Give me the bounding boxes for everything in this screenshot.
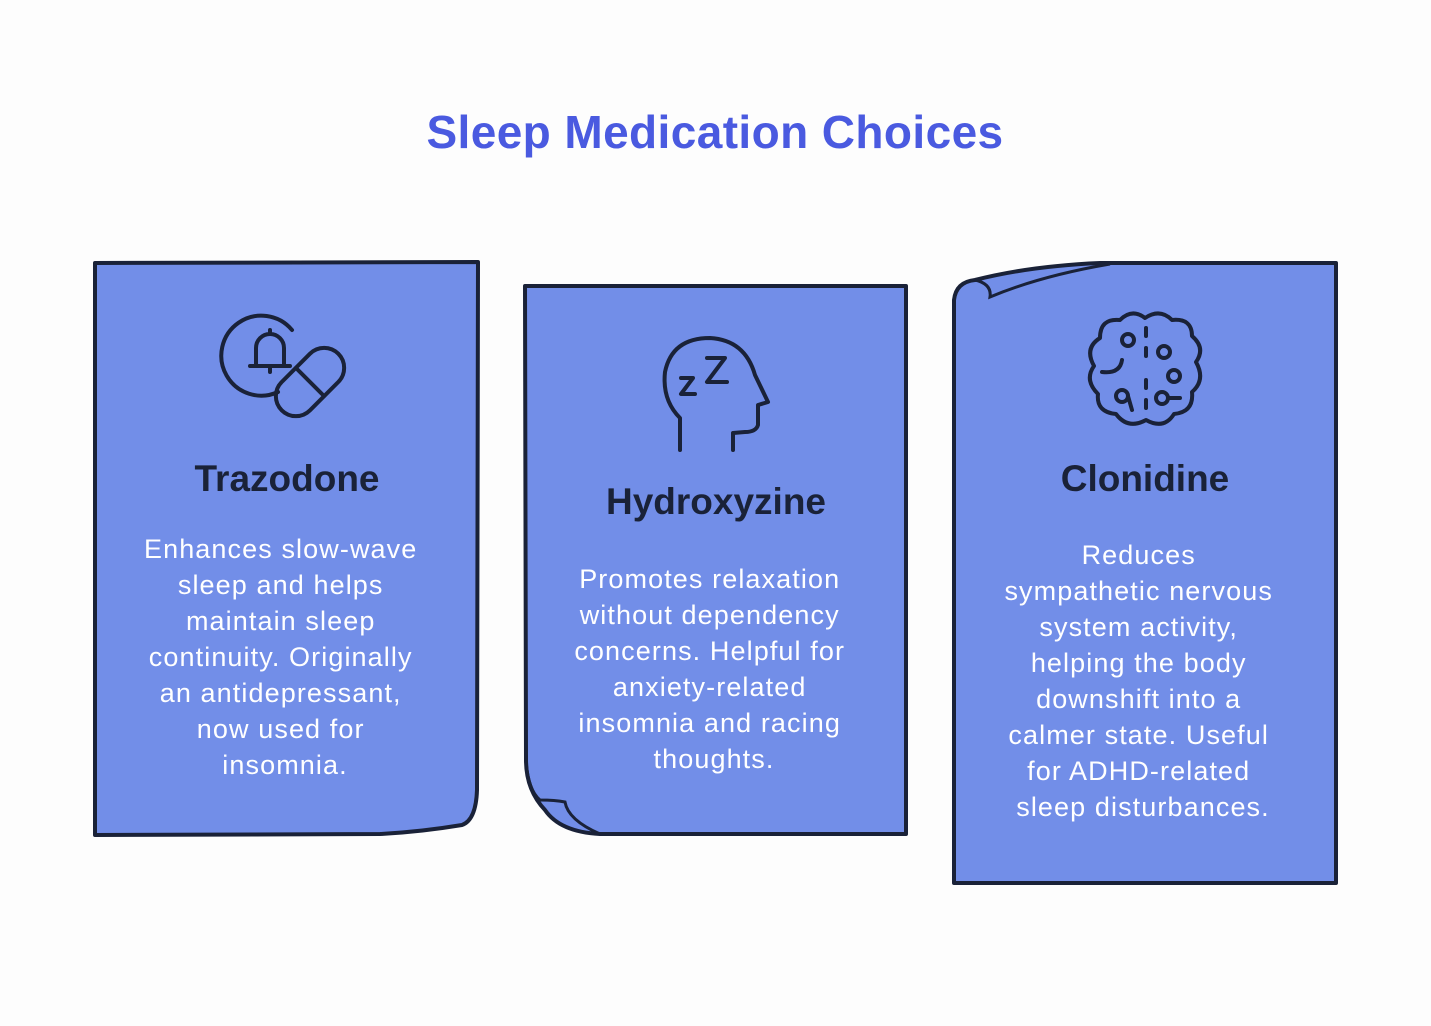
heading: Trazodone: Trazodone bbox=[194, 458, 380, 499]
text: Hydroxyzine description: Promotes relaxation bbox=[579, 564, 840, 594]
text: Clonidine description: Reduces bbox=[1082, 540, 1196, 570]
text: Clonidine description: calmer state. Useful bbox=[1008, 720, 1269, 750]
text: Clonidine description: for ADHD-related bbox=[1027, 756, 1250, 786]
panel: Trazodone bbox=[95, 262, 478, 835]
text: Trazodone description: now used for bbox=[197, 714, 365, 744]
text: Hydroxyzine description: without dependency bbox=[579, 600, 840, 630]
text: Trazodone description: Enhances slow-wave bbox=[144, 534, 417, 564]
text: Hydroxyzine description: insomnia and racing bbox=[578, 708, 841, 738]
text: Hydroxyzine description: thoughts. bbox=[654, 744, 774, 774]
text: Trazodone description: maintain sleep bbox=[186, 606, 375, 636]
icon: bell and pill bbox=[221, 316, 352, 424]
icon: head with zz bbox=[665, 338, 768, 450]
heading: Clonidine: Clonidine bbox=[1061, 458, 1229, 499]
text: Hydroxyzine description: anxiety-related bbox=[613, 672, 806, 702]
text: Clonidine description: downshift into a bbox=[1036, 684, 1241, 714]
text: Clonidine description: sympathetic nervous bbox=[1004, 576, 1273, 606]
panel: Clonidine bbox=[954, 263, 1336, 883]
text: Trazodone description: an antidepressant, bbox=[160, 678, 402, 708]
text: Trazodone description: sleep and helps bbox=[178, 570, 384, 600]
text: Trazodone description: continuity. Originally bbox=[149, 642, 413, 672]
text: Hydroxyzine description: concerns. Helpful for bbox=[574, 636, 845, 666]
text: Clonidine description: sleep disturbances. bbox=[1016, 792, 1270, 822]
text: Trazodone description: insomnia. bbox=[222, 750, 348, 780]
text: Clonidine description: helping the body bbox=[1031, 648, 1247, 678]
title: Sleep Medication Choices bbox=[426, 106, 1004, 158]
text: Clonidine description: system activity, bbox=[1039, 612, 1238, 642]
icon: brain bbox=[1090, 313, 1200, 424]
heading: Hydroxyzine: Hydroxyzine bbox=[606, 481, 826, 522]
panel: Hydroxyzine bbox=[525, 286, 906, 834]
